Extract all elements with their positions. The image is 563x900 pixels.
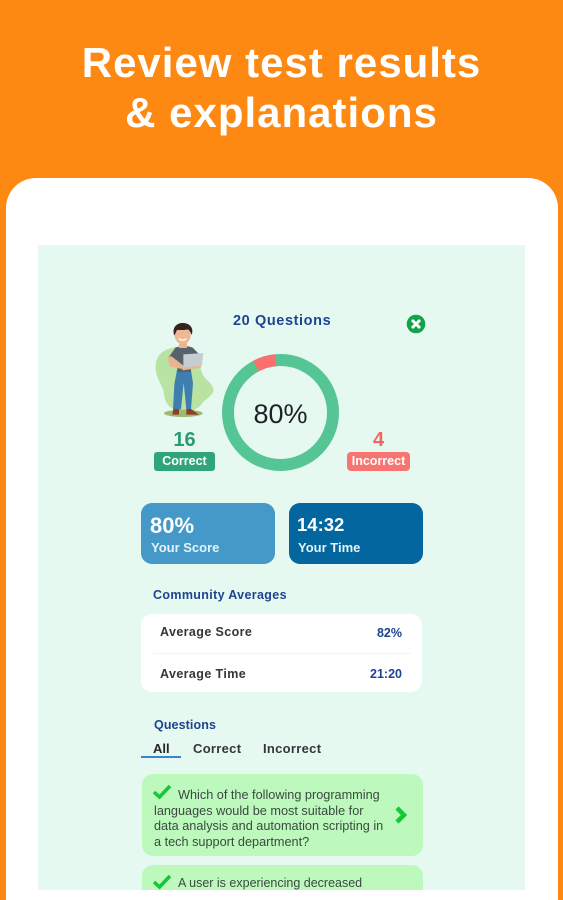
panel: community averages — [141, 614, 422, 692]
question text: a tech support department? — [154, 834, 309, 848]
heading: questions: Questions — [154, 718, 216, 732]
question text: languages would be most suitable for — [154, 804, 363, 818]
tab: all: All — [153, 741, 170, 756]
score value: 80% — [150, 513, 194, 538]
tab underline — [141, 756, 181, 758]
value: average score: 82% — [377, 626, 402, 640]
card: your score — [141, 503, 275, 564]
heading: 20 questions: 20 Questions — [233, 313, 331, 329]
white card — [6, 178, 558, 900]
badge: incorrect — [347, 452, 410, 471]
chart: score donut — [222, 354, 339, 471]
icon: check — [152, 784, 172, 800]
stat: correct count: 16 — [173, 429, 196, 451]
donut value: 80% — [253, 399, 308, 429]
row: average time: Average Time — [160, 667, 246, 681]
badge: incorrect: Incorrect — [352, 454, 405, 468]
question text: data analysis and automation scripting in — [154, 819, 383, 833]
value: average time: 21:20 — [370, 667, 402, 681]
row: average score: Average Score — [160, 625, 252, 639]
illustration: man with laptop — [156, 323, 214, 417]
icon: chevron — [396, 806, 408, 824]
badge: correct — [154, 452, 215, 471]
panel: results screen — [38, 245, 525, 890]
title: & explanations — [125, 89, 438, 136]
title: Review test results — [82, 39, 481, 86]
time value: 14:32 — [297, 514, 344, 535]
tab: correct: Correct — [193, 741, 241, 756]
row divider — [153, 653, 411, 654]
card: your time — [289, 503, 423, 564]
question text: Which of the following programming — [178, 788, 380, 802]
title — [82, 39, 481, 136]
icon: close — [406, 314, 426, 334]
question card 2 — [142, 865, 423, 900]
question text — [154, 788, 383, 848]
stat: incorrect count: 4 — [373, 429, 384, 451]
time label: Your Time — [298, 540, 360, 555]
question card 1 — [142, 774, 423, 856]
badge: correct: Correct — [162, 454, 207, 468]
icon: check — [152, 874, 172, 890]
tab: incorrect: Incorrect — [263, 741, 321, 756]
score label: Your Score — [151, 540, 219, 555]
heading: community averages: Community Averages — [153, 588, 287, 602]
question text: A user is experiencing decreased — [178, 876, 362, 890]
